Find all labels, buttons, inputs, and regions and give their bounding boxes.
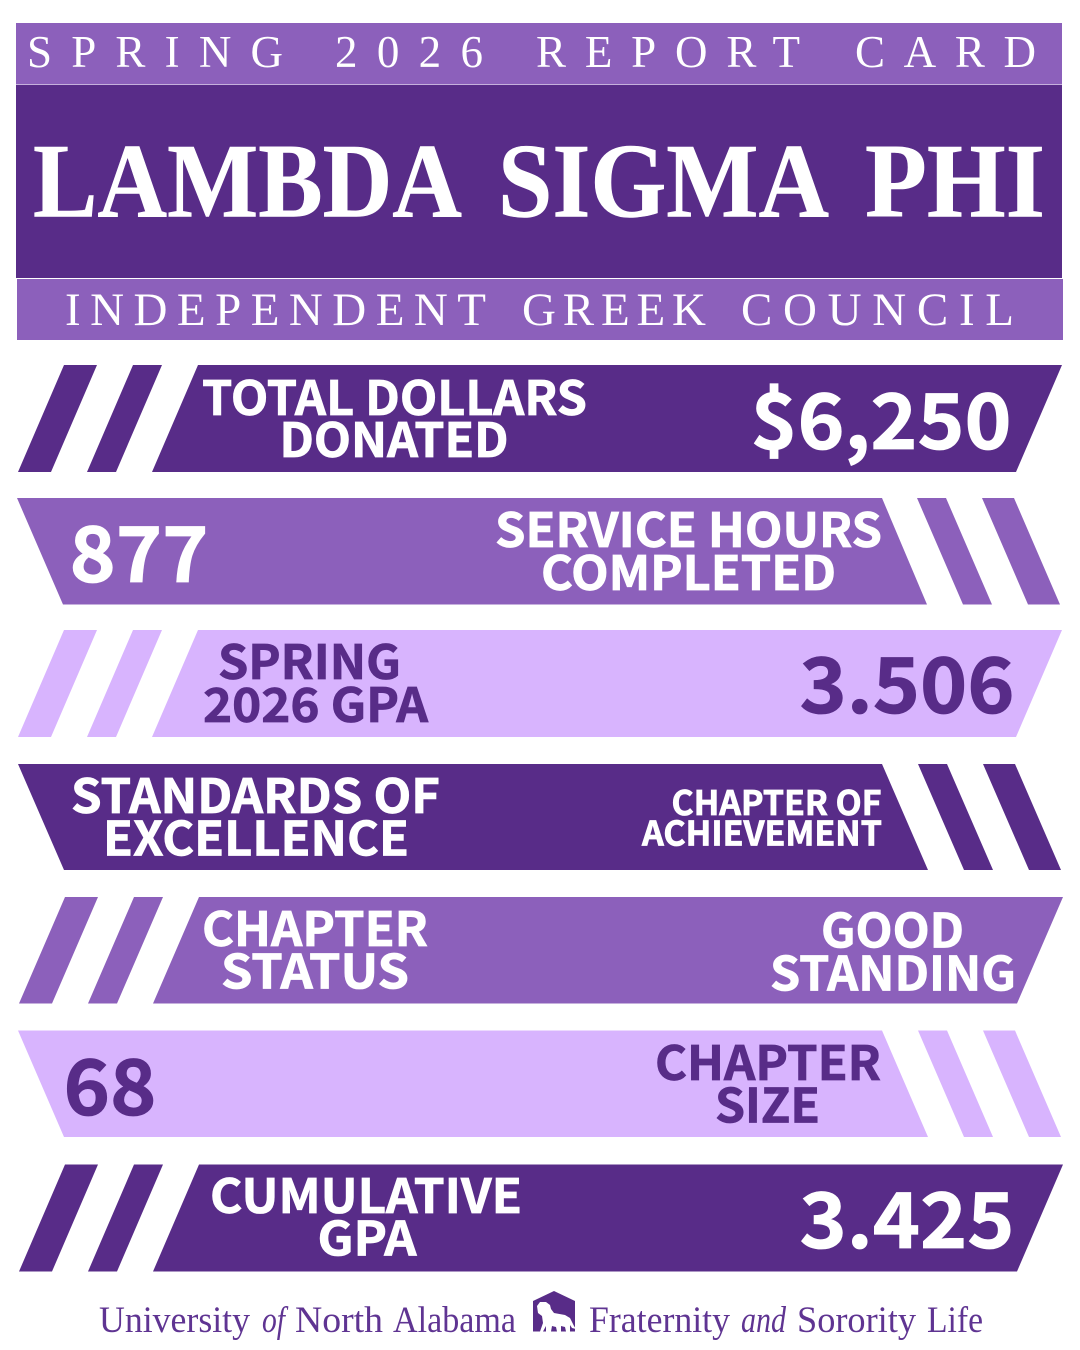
row: chapter status: STANDING: [770, 936, 1016, 1004]
footer: office name: [589, 1300, 983, 1341]
row: chapter size: CHAPTER: [655, 1025, 881, 1094]
subtitle band: council: COUNCIL: [741, 284, 1014, 336]
row: service hours completed: [17, 492, 1060, 605]
row: cumulative GPA: CUMULATIVE: [210, 1158, 522, 1227]
title band: chapter name: LAMBDA: [33, 122, 462, 240]
row: spring 2026 GPA: 2026 GPA: [203, 667, 429, 736]
footer: office name: and: [741, 1300, 786, 1341]
row: service hours completed: COMPLETED: [541, 535, 836, 604]
row: standards of excellence: STANDARDS OF: [71, 758, 440, 827]
row: cumulative GPA: [19, 1158, 1063, 1272]
row: total dollars donated: [18, 360, 1062, 472]
row: spring 2026 GPA: SPRING: [218, 624, 401, 693]
row: chapter status: GOOD: [821, 892, 964, 962]
row: chapter status: [19, 891, 1063, 1004]
row: standards of excellence: ACHIEVEMENT: [641, 806, 882, 856]
footer: university name: University: [99, 1300, 250, 1341]
footer: university name: Alabama: [393, 1300, 516, 1341]
header band: semester: SPRING: [27, 27, 283, 77]
row: chapter size: [18, 1025, 1061, 1138]
row: spring 2026 GPA: [18, 624, 1062, 737]
header band: semester: REPORT: [536, 27, 800, 77]
header band: semester: 2026: [335, 27, 483, 77]
row: standards of excellence: EXCELLENCE: [103, 800, 409, 870]
footer: office name: Sorority: [797, 1300, 916, 1341]
row: cumulative GPA: 3.425: [800, 1160, 1014, 1271]
subtitle band: council: GREEK: [522, 284, 706, 336]
footer: office name: Life: [927, 1300, 983, 1341]
footer: university name: North: [295, 1300, 384, 1341]
footer: university name: of: [262, 1300, 289, 1341]
row: chapter status: CHAPTER: [202, 891, 428, 960]
footer: university name: [99, 1300, 516, 1341]
row: service hours completed: 877: [70, 494, 208, 605]
row: standards of excellence: CHAPTER OF: [672, 776, 882, 825]
row: standards of excellence: [18, 758, 1061, 870]
row: chapter status: STATUS: [221, 934, 409, 1002]
row: cumulative GPA: GPA: [318, 1200, 417, 1270]
footer: office name: Fraternity: [589, 1300, 730, 1341]
title band: chapter name: PHI: [865, 122, 1045, 240]
subtitle band: council: [17, 279, 1063, 340]
row: chapter size: 68: [64, 1027, 156, 1138]
subtitle band: council: INDEPENDENT: [65, 284, 486, 336]
row: total dollars donated: DONATED: [280, 402, 508, 471]
row: service hours completed: SERVICE HOURS: [495, 492, 882, 561]
icon: lion crest: [533, 1291, 576, 1332]
header band: semester: CARD: [855, 27, 1036, 77]
title band: chapter name: [16, 85, 1062, 278]
row: spring 2026 GPA: 3.506: [800, 625, 1014, 736]
header band: semester: [16, 23, 1062, 84]
title band: chapter name: SIGMA: [498, 122, 829, 240]
row: total dollars donated: $6,250: [750, 361, 1012, 472]
row: total dollars donated: TOTAL DOLLARS: [202, 360, 587, 429]
row: chapter size: SIZE: [715, 1068, 820, 1136]
